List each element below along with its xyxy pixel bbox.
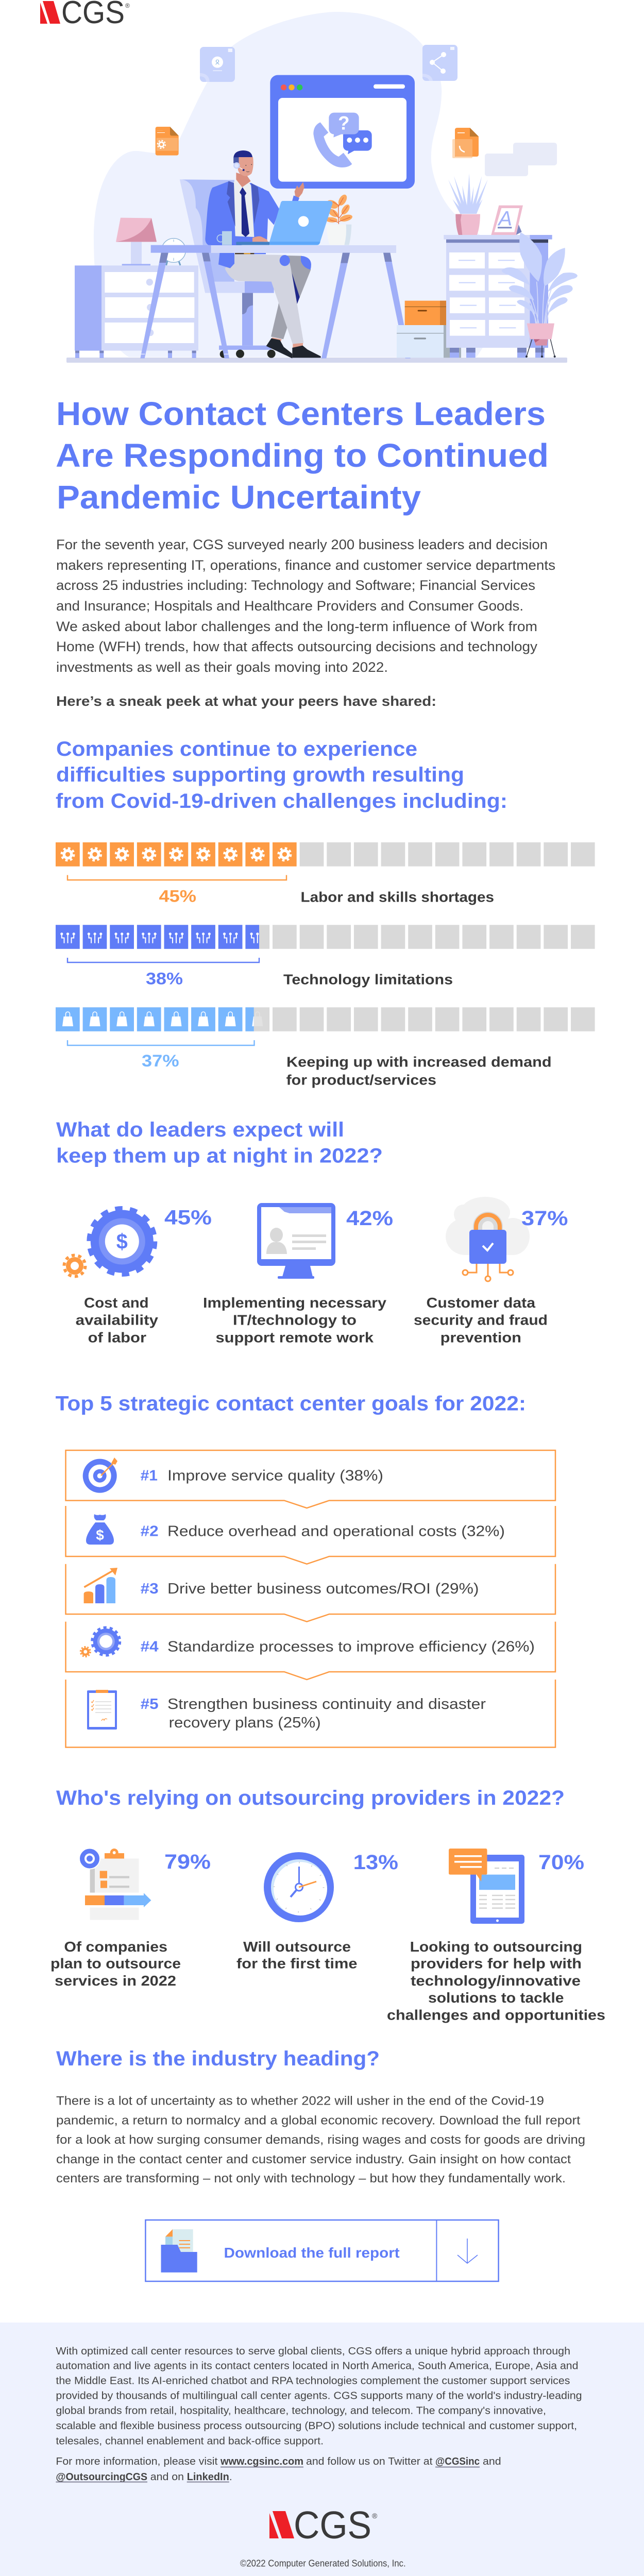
footer text: the Middle East. Its AI-enriched chatbot and RPA technologies complement the customer support services: [56, 2375, 570, 2386]
title: Are Responding to Continued: [56, 437, 549, 474]
footer text: [56, 2346, 582, 2447]
heading: leaders at night: [56, 1118, 383, 1167]
icon: gears with dollar: [64, 1209, 155, 1277]
question bubble: [329, 113, 359, 138]
label: technology help: technology/innovative: [411, 1973, 581, 1989]
footer text: provided by thousands of multilingual call center agents. CGS supports many of the world's industry-leading: [56, 2391, 582, 2402]
document icon: phone: [452, 128, 479, 158]
goal 5: Strengthen business continuity and disaster: [167, 1696, 486, 1713]
goal 5: #5: [141, 1696, 159, 1713]
heading: challenges: Companies continue to experience: [56, 738, 417, 760]
label: remote work: [203, 1295, 386, 1346]
lapels: [227, 181, 235, 227]
icon: document folder: [161, 2229, 197, 2273]
intro text: We asked about labor challenges and the long-term influence of Work from: [56, 619, 537, 634]
label: remote work: Implementing necessary: [203, 1295, 386, 1311]
footer panel: [0, 2323, 644, 2576]
label: data security: [414, 1295, 548, 1346]
head: [238, 157, 253, 176]
picture frame: A: [497, 207, 512, 230]
label: first time: [236, 1939, 358, 1972]
label: plan to outsource: services in 2022: [55, 1973, 176, 1989]
title: Pandemic Uncertainty: [57, 479, 421, 516]
label: technology help: challenges and opportunities: [387, 2007, 605, 2023]
question bubble: ?: [338, 113, 350, 134]
desk legs right: [321, 253, 411, 359]
contact links: LinkedIn: [187, 2471, 229, 2483]
call window: [270, 75, 415, 189]
heading: challenges: [56, 738, 507, 812]
heading: industry: Where is the industry heading?: [56, 2047, 380, 2070]
label: technology help: Looking to outsourcing: [410, 1939, 582, 1955]
mug: [217, 231, 232, 245]
pictogram bar: labor 45%: 45%: [159, 887, 196, 906]
laptop: [236, 201, 332, 245]
goal 4: Standardize processes to improve efficiency (26%): [167, 1638, 535, 1655]
icon: clock: [264, 1852, 334, 1922]
contact links: and on: [150, 2471, 184, 2483]
copyright: ©2022 Computer Generated Solutions, Inc.: [240, 2558, 406, 2569]
icon: monitor with profile: [257, 1203, 335, 1279]
stat: 45%: 45%: [164, 1207, 212, 1229]
tie: [240, 187, 249, 237]
goal 1: Improve service quality (38%): [167, 1467, 383, 1484]
label: first time: Will outsource: [243, 1939, 351, 1955]
pictogram bar: demand 37%: [56, 1012, 595, 1070]
goal 3: [66, 1564, 555, 1622]
label: plan to outsource: plan to outsource: [50, 1956, 181, 1972]
footer text: telesales, channel enablement and back-office support.: [56, 2435, 324, 2447]
intro text: For the seventh year, CGS surveyed nearly 200 business leaders and decision: [56, 537, 548, 552]
intro text: investments as well as their goals moving into 2022.: [56, 659, 388, 675]
icon: tablet with message: [449, 1849, 524, 1924]
contact links: and: [483, 2456, 501, 2467]
title: How Contact Centers Leaders: [56, 395, 546, 432]
goal 1: #1: [141, 1467, 158, 1484]
left furniture and agent: [75, 150, 396, 359]
industry text: change in the contact center and customer service industry. Gain insight on how contact: [56, 2153, 571, 2166]
goal 3: Drive better business outcomes/ROI (29%): [167, 1581, 479, 1597]
icon: money bag: $: [96, 1527, 104, 1543]
label: plan to outsource: Of companies: [64, 1939, 167, 1955]
card icon: contact: [200, 47, 235, 82]
goal 1: [66, 1450, 555, 1508]
stat: 70%: 70%: [538, 1851, 584, 1874]
right cabinet: [444, 235, 552, 358]
contact links: www.cgsinc.com: [220, 2456, 303, 2467]
heading: challenges: from Covid-19-driven challenges including:: [56, 790, 507, 812]
intro text: and Insurance; Hospitals and Healthcare Providers and Consumer Goods.: [56, 598, 523, 614]
phone handset: [313, 122, 352, 167]
logo: CGS top: ®: [125, 2, 130, 9]
shirt: [233, 179, 254, 237]
icon: gears: [80, 1628, 120, 1657]
footer text: scalable and flexible business process outsourcing (BPO) solutions include technical and customer support,: [56, 2420, 577, 2432]
industry text: for a look at how surging consumer demands, rising wages and costs for goods are driving: [56, 2133, 585, 2147]
icon: growth chart: [84, 1568, 117, 1603]
label: technology help: solutions to tackle: [428, 1990, 564, 2006]
icon: money bag: [86, 1514, 114, 1545]
forearm and hand: [234, 236, 252, 245]
neck: [236, 173, 251, 187]
logo: CGS bottom: ®: [372, 2512, 378, 2520]
label: technology help: [387, 1939, 605, 2023]
card icon: share: [422, 45, 457, 81]
raised hand: [295, 182, 304, 197]
desk plant: [325, 193, 353, 245]
trousers: [225, 254, 303, 344]
goal 2: #2: [141, 1523, 159, 1539]
contact links: and follow us on Twitter at: [306, 2456, 433, 2467]
heading: challenges: difficulties supporting growth resulting: [56, 764, 464, 786]
label: plan to outsource: [50, 1939, 181, 1989]
picture frame: [491, 206, 523, 235]
heading: leaders at night: What do leaders expect will: [56, 1118, 344, 1141]
speech clouds: [485, 143, 557, 176]
heading: top 5 goals: Top 5 strategic contact center goals for 2022:: [56, 1393, 526, 1415]
document icon: gear: [156, 127, 179, 156]
download button: Download the full report: [224, 2245, 400, 2261]
label: cost of labor: availability: [76, 1312, 158, 1328]
industry text: [56, 2094, 585, 2185]
label: data security: prevention: [440, 1330, 521, 1346]
download button: [145, 2220, 499, 2281]
arrow: download: [457, 2239, 478, 2263]
background blob: [94, 12, 495, 357]
footer text: automation and live agents in its contact centers located in North America, South America, Europe, Asia and: [56, 2361, 578, 2372]
back leg: [271, 256, 311, 339]
heading: outsourcing: Who's relying on outsourcing providers in 2022?: [56, 1787, 565, 1809]
industry text: pandemic, a return to normalcy and a global economic recovery. Download the full report: [56, 2114, 581, 2128]
floor: [66, 358, 567, 363]
spiky plant in vase: [448, 174, 488, 235]
label: first time: for the first time: [236, 1956, 358, 1972]
industry text: centers are transforming – not only with technology – but how they fundamentally work.: [56, 2172, 566, 2185]
label: data security: security and fraud: [414, 1312, 548, 1328]
contact links: For more information, please visit: [56, 2456, 218, 2467]
goal 2: Reduce overhead and operational costs (32%): [167, 1523, 505, 1539]
goal 4: [66, 1622, 555, 1680]
stat: 37%: 37%: [521, 1207, 568, 1230]
contact links: @CGSinc: [435, 2456, 480, 2467]
label: demand: Keeping up with increased demand: [286, 1054, 552, 1070]
shoes: [266, 338, 292, 359]
label: demand: [286, 1054, 552, 1088]
chair: [180, 179, 276, 358]
intro text: Home (WFH) trends, how that affects outsourcing decisions and technology: [56, 639, 538, 654]
goal 2: [66, 1506, 555, 1564]
logo: CGS bottom: CGS: [294, 2503, 371, 2547]
label: cost of labor: [76, 1295, 158, 1346]
stat: 79%: 79%: [164, 1851, 211, 1873]
lamp: [116, 218, 157, 265]
label: technology: Technology limitations: [283, 972, 453, 987]
footer text: global brands from retail, hospitality, healthcare, technology, and telecom. The company's innovative,: [56, 2405, 546, 2417]
label: demand: for product/services: [286, 1072, 436, 1088]
industry text: There is a lot of uncertainty as to whether 2022 will usher in the end of the Covid-19: [56, 2094, 544, 2108]
goal 5: recovery plans (25%): [169, 1715, 321, 1731]
label: labor: Labor and skills shortages: [301, 889, 494, 905]
intro text: makers representing IT, operations, finance and customer service departments: [56, 557, 555, 573]
icon: gears with dollar: $: [116, 1229, 128, 1253]
pictogram bar: demand 37%: 37%: [142, 1052, 179, 1070]
desk clock: [162, 239, 185, 265]
agent: [205, 150, 321, 359]
goal 4: #4: [141, 1638, 159, 1655]
heading: leaders at night: keep them up at night in 2022?: [56, 1145, 383, 1167]
title: [56, 395, 549, 516]
left cabinet: [75, 265, 198, 358]
label: remote work: support remote work: [215, 1330, 374, 1346]
intro text: across 25 industries including: Technology and Software; Financial Services: [56, 578, 535, 593]
stat: 42%: 42%: [346, 1207, 393, 1230]
stat: 13%: 13%: [353, 1851, 398, 1874]
floating icons and call window: [156, 47, 415, 189]
intro text: [56, 537, 555, 675]
label: remote work: IT/technology to: [233, 1312, 357, 1328]
floor plant: [501, 232, 578, 358]
desk: [140, 245, 396, 359]
icon: cloud padlock: [446, 1197, 530, 1281]
pictogram bar: labor 45%: [56, 849, 595, 906]
contact links: @OutsourcingCGS: [56, 2471, 147, 2483]
label: cost of labor: Cost and: [84, 1295, 149, 1311]
sneak peek line: Here’s a sneak peek at what your peers have shared:: [56, 693, 436, 709]
knee patches: [280, 255, 290, 266]
goal 5: [66, 1680, 555, 1748]
icon: clipboard: [87, 1690, 117, 1730]
icon: target: [83, 1458, 117, 1493]
right furniture: [321, 174, 578, 359]
label: technology help: providers for help with: [411, 1956, 582, 1972]
typing bubble: [343, 130, 372, 154]
ankles: [272, 337, 282, 342]
storage boxes: [397, 301, 461, 358]
label: cost of labor: of labor: [88, 1330, 146, 1346]
icon: outsourcing checklist: [79, 1849, 151, 1920]
pictogram bar: technology 38%: 38%: [146, 970, 183, 988]
contact links: .: [229, 2471, 232, 2483]
pictogram bar: technology 38%: [56, 933, 595, 988]
goal 3: #3: [141, 1581, 159, 1597]
label: data security: Customer data: [427, 1295, 535, 1311]
belt: [235, 252, 266, 254]
contact links: [56, 2456, 501, 2483]
jacket: [205, 181, 280, 246]
illustration: contact center agent at desk: [66, 12, 578, 363]
footer text: With optimized call center resources to serve global clients, CGS offers a unique hybrid approach through: [56, 2346, 570, 2357]
